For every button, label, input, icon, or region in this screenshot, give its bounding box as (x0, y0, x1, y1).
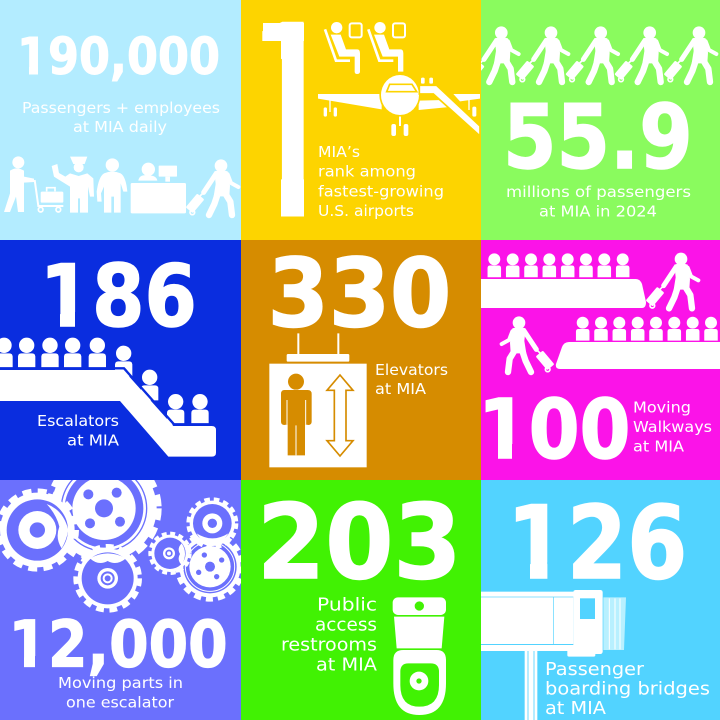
caption: passengers and employees: Passengers + employees (22, 99, 220, 117)
icon: uniformed officer (52, 157, 94, 213)
big number: 203: 203 (257, 483, 462, 603)
icon: up and down arrow (327, 375, 353, 456)
panel: escalators (0, 240, 241, 480)
panel: public restrooms (241, 480, 481, 720)
icon: seated passenger two (368, 22, 405, 72)
big number: 186: 186 (40, 247, 197, 347)
caption: rank among fastest-growing airports: rank among (318, 162, 416, 180)
lower walkway (556, 342, 720, 369)
caption: moving parts: one escalator (66, 694, 175, 712)
big number: 12,000: 12,000 (8, 608, 228, 683)
caption: moving walkways: Moving (633, 398, 691, 416)
caption: rank among fastest-growing airports (318, 143, 444, 220)
gear: large top centre (48, 480, 162, 562)
panel: escalator moving parts (0, 456, 241, 720)
icon: seated passengers and airplane (318, 22, 480, 136)
caption: public restrooms: Public (317, 594, 377, 616)
caption: public restrooms (281, 594, 378, 676)
panel: annual passengers (466, 0, 720, 240)
icon: person silhouette in elevator (281, 374, 312, 455)
big number: 186 (48, 261, 194, 328)
caption: rank among fastest-growing airports: fastest-growing (318, 182, 444, 200)
icon: seated passenger one (325, 22, 362, 74)
gear: large left (0, 493, 75, 567)
caption: millions of passengers: millions of passengers (506, 183, 691, 201)
row of walking passengers (466, 26, 716, 82)
panel: boarding bridges (480, 480, 720, 720)
icon: elevator with person and arrow (269, 333, 367, 467)
big number: 100 (486, 396, 628, 460)
icon: standing passenger (97, 158, 127, 213)
caption: moving walkways: Walkways (633, 418, 712, 436)
caption: elevators: at MIA (375, 380, 427, 398)
icon: check-in desk with clerk (131, 163, 186, 213)
caption: elevators: Elevators (375, 361, 448, 379)
panel: elevators (241, 239, 481, 480)
caption: moving parts: Moving parts in (58, 674, 183, 692)
caption: escalators: at MIA (67, 432, 120, 450)
big number: 190,000: 190,000 (17, 27, 220, 86)
caption: moving parts (58, 674, 183, 712)
caption: millions of passengers: at MIA in 2024 (539, 202, 657, 220)
caption: moving walkways: at MIA (633, 438, 685, 456)
icon: people in airport terminal (4, 156, 186, 213)
icon: airplane with boarding stairs (318, 73, 480, 136)
panel: moving walkways (476, 240, 720, 480)
big number: 1 (262, 22, 304, 216)
caption: rank among fastest-growing airports: MIA’s (318, 143, 360, 161)
caption: escalators: Escalators (37, 412, 119, 430)
icon: interlocking gears (0, 480, 241, 613)
escalator body (0, 370, 216, 457)
caption: escalators (38, 414, 119, 446)
caption: public restrooms: at MIA (316, 654, 378, 676)
icon: toilet (393, 597, 446, 715)
icon: passenger boarding bridge (480, 590, 626, 720)
caption: public restrooms: access (315, 614, 377, 636)
big number: 100: 100 (478, 383, 630, 478)
big number: 190,000 (22, 36, 218, 82)
caption: elevators (375, 361, 448, 398)
icon: moving walkways with passengers (480, 253, 720, 372)
upper walkway riders (488, 253, 629, 277)
icon: traveller with luggage cart (4, 156, 63, 212)
upper walkway (480, 279, 646, 308)
caption: boarding bridges (545, 659, 710, 719)
caption: public restrooms: restrooms (281, 634, 377, 656)
panel: daily passengers and employees (0, 0, 241, 240)
caption: moving walkways (634, 401, 712, 452)
gear: lower right large (179, 536, 241, 597)
caption: rank among fastest-growing airports: U.S. airports (318, 202, 414, 220)
caption: passengers and employees: at MIA daily (73, 118, 167, 136)
caption: boarding bridges: boarding bridges (545, 678, 710, 700)
caption: boarding bridges: Passenger (545, 659, 645, 680)
lower walkway riders (576, 317, 718, 341)
big number: 55.9: 55.9 (503, 86, 693, 189)
caption: boarding bridges: at MIA (545, 698, 607, 719)
icon: escalator with riders (0, 338, 217, 457)
gear: small centre right (151, 535, 189, 572)
riders on escalator (0, 338, 209, 425)
caption: millions of passengers (508, 186, 690, 216)
caption: passengers and employees (24, 102, 220, 135)
gear: lower centre (78, 548, 138, 608)
big number: 330: 330 (268, 239, 451, 349)
panel: rank among airports (241, 0, 481, 240)
icon: walking passenger with suitcase (186, 159, 238, 215)
big number: 126: 126 (507, 484, 687, 602)
walking passenger going left (502, 316, 554, 372)
gear: upper right (190, 501, 235, 546)
walking passenger going right (646, 253, 698, 308)
